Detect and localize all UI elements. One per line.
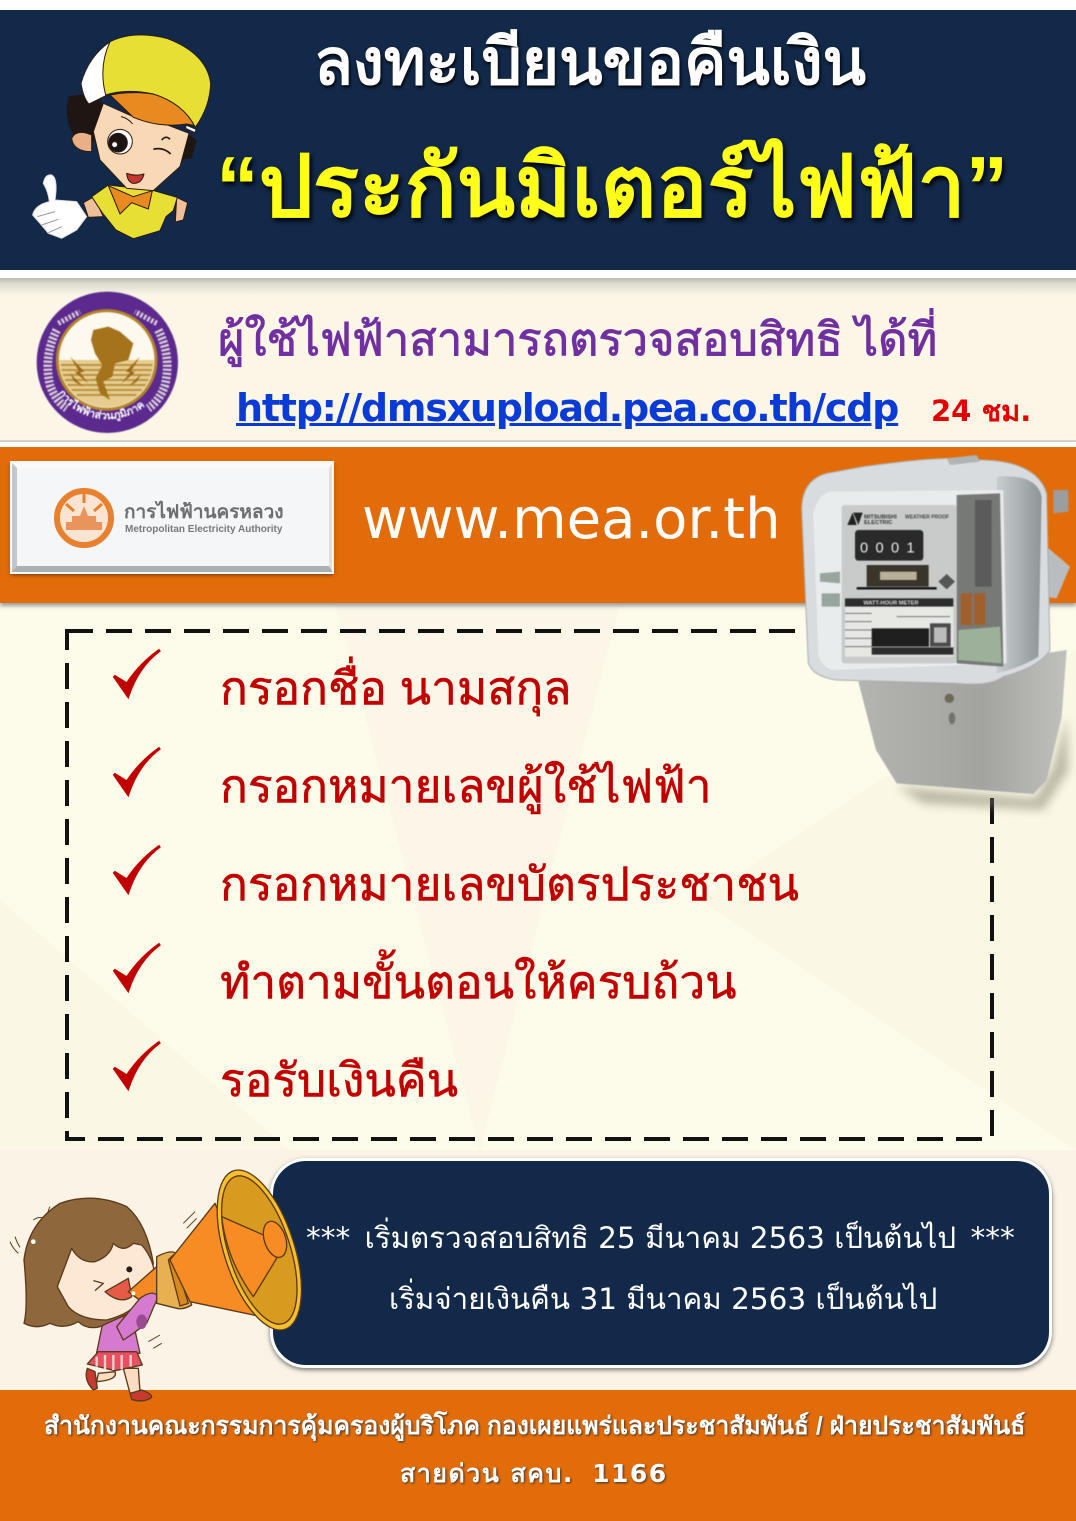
icon: electricity meter: WATT-HOUR METER [863, 601, 919, 607]
content background [0, 603, 1076, 1390]
header title line 1: ลงทะเบียนขอคืนเงิน [314, 28, 866, 98]
icon: girl with megaphone [10, 1169, 302, 1402]
icon: check 4 [112, 942, 161, 994]
band: MEA [0, 447, 1076, 603]
step 4: ทำตามขั้นตอนให้ครบถ้วน [220, 956, 737, 1008]
icon: check 2 [112, 746, 161, 798]
footer office line: สำนักงานคณะกรรมการคุ้มครองผู้บริโภค กองเผยแพร่และประชาสัมพันธ์ / ฝ่ายประชาสัมพันธ์ [44, 1413, 1025, 1440]
header title line 2: “ประกันมิเตอร์ไฟฟ้า” [216, 140, 1008, 235]
MEA url: www.mea.or.th [362, 487, 781, 552]
24 hour note: 24 ชม. [931, 394, 1031, 428]
header banner [0, 10, 1076, 270]
icon: PEA logo [36, 290, 179, 434]
panel: steps dashed box [65, 629, 994, 1141]
step 3: กรอกหมายเลขบัตรประชาชน [220, 858, 799, 910]
icon: check 5 [112, 1040, 161, 1092]
PEA heading: ผู้ใช้ไฟฟ้าสามารถตรวจสอบสิทธิ ได้ที่ [218, 314, 937, 365]
icon: electricity meter: ELECTRIC [864, 520, 892, 526]
footer hotline: สายด่วน สคบ. 1166 [400, 1459, 668, 1488]
icon: electricity meter: 0001 [860, 541, 922, 557]
MEA English name: Metropolitan Electricity Authority [125, 524, 282, 535]
icon: electricity meter: WEATHER PROOF [905, 514, 949, 520]
MEA name: การไฟฟ้านครหลวง [124, 502, 284, 523]
date line 2: เริ่มจ่ายเงินคืน 31 มีนาคม 2563 เป็นต้นไป [389, 1282, 937, 1316]
step 2: กรอกหมายเลขผู้ใช้ไฟฟ้า [220, 760, 712, 812]
date line 1: *** เริ่มตรวจสอบสิทธิ 25 มีนาคม 2563 เป็นต้นไป *** [306, 1221, 1015, 1255]
icon: MEA emblem [54, 488, 114, 548]
step 5: รอรับเงินคืน [220, 1054, 458, 1106]
panel: dates notice [270, 1158, 1052, 1368]
icon: electricity meter [800, 454, 1074, 815]
footer [0, 1390, 1076, 1521]
MEA logo card [11, 462, 333, 573]
band: PEA check notice [0, 278, 1076, 442]
icon: check 3 [112, 844, 161, 896]
PEA url: http://dmsxupload.pea.co.th/cdp [236, 386, 898, 430]
icon: mascot with thumbs up [32, 34, 212, 240]
step 1: กรอกชื่อ นามสกุล [220, 662, 571, 714]
icon: PEA logo: การไฟฟ้าส่วนภูมิภาค [58, 390, 146, 422]
icon: electricity meter: MITSUBISHI [864, 514, 897, 520]
icon: check 1 [112, 648, 161, 700]
